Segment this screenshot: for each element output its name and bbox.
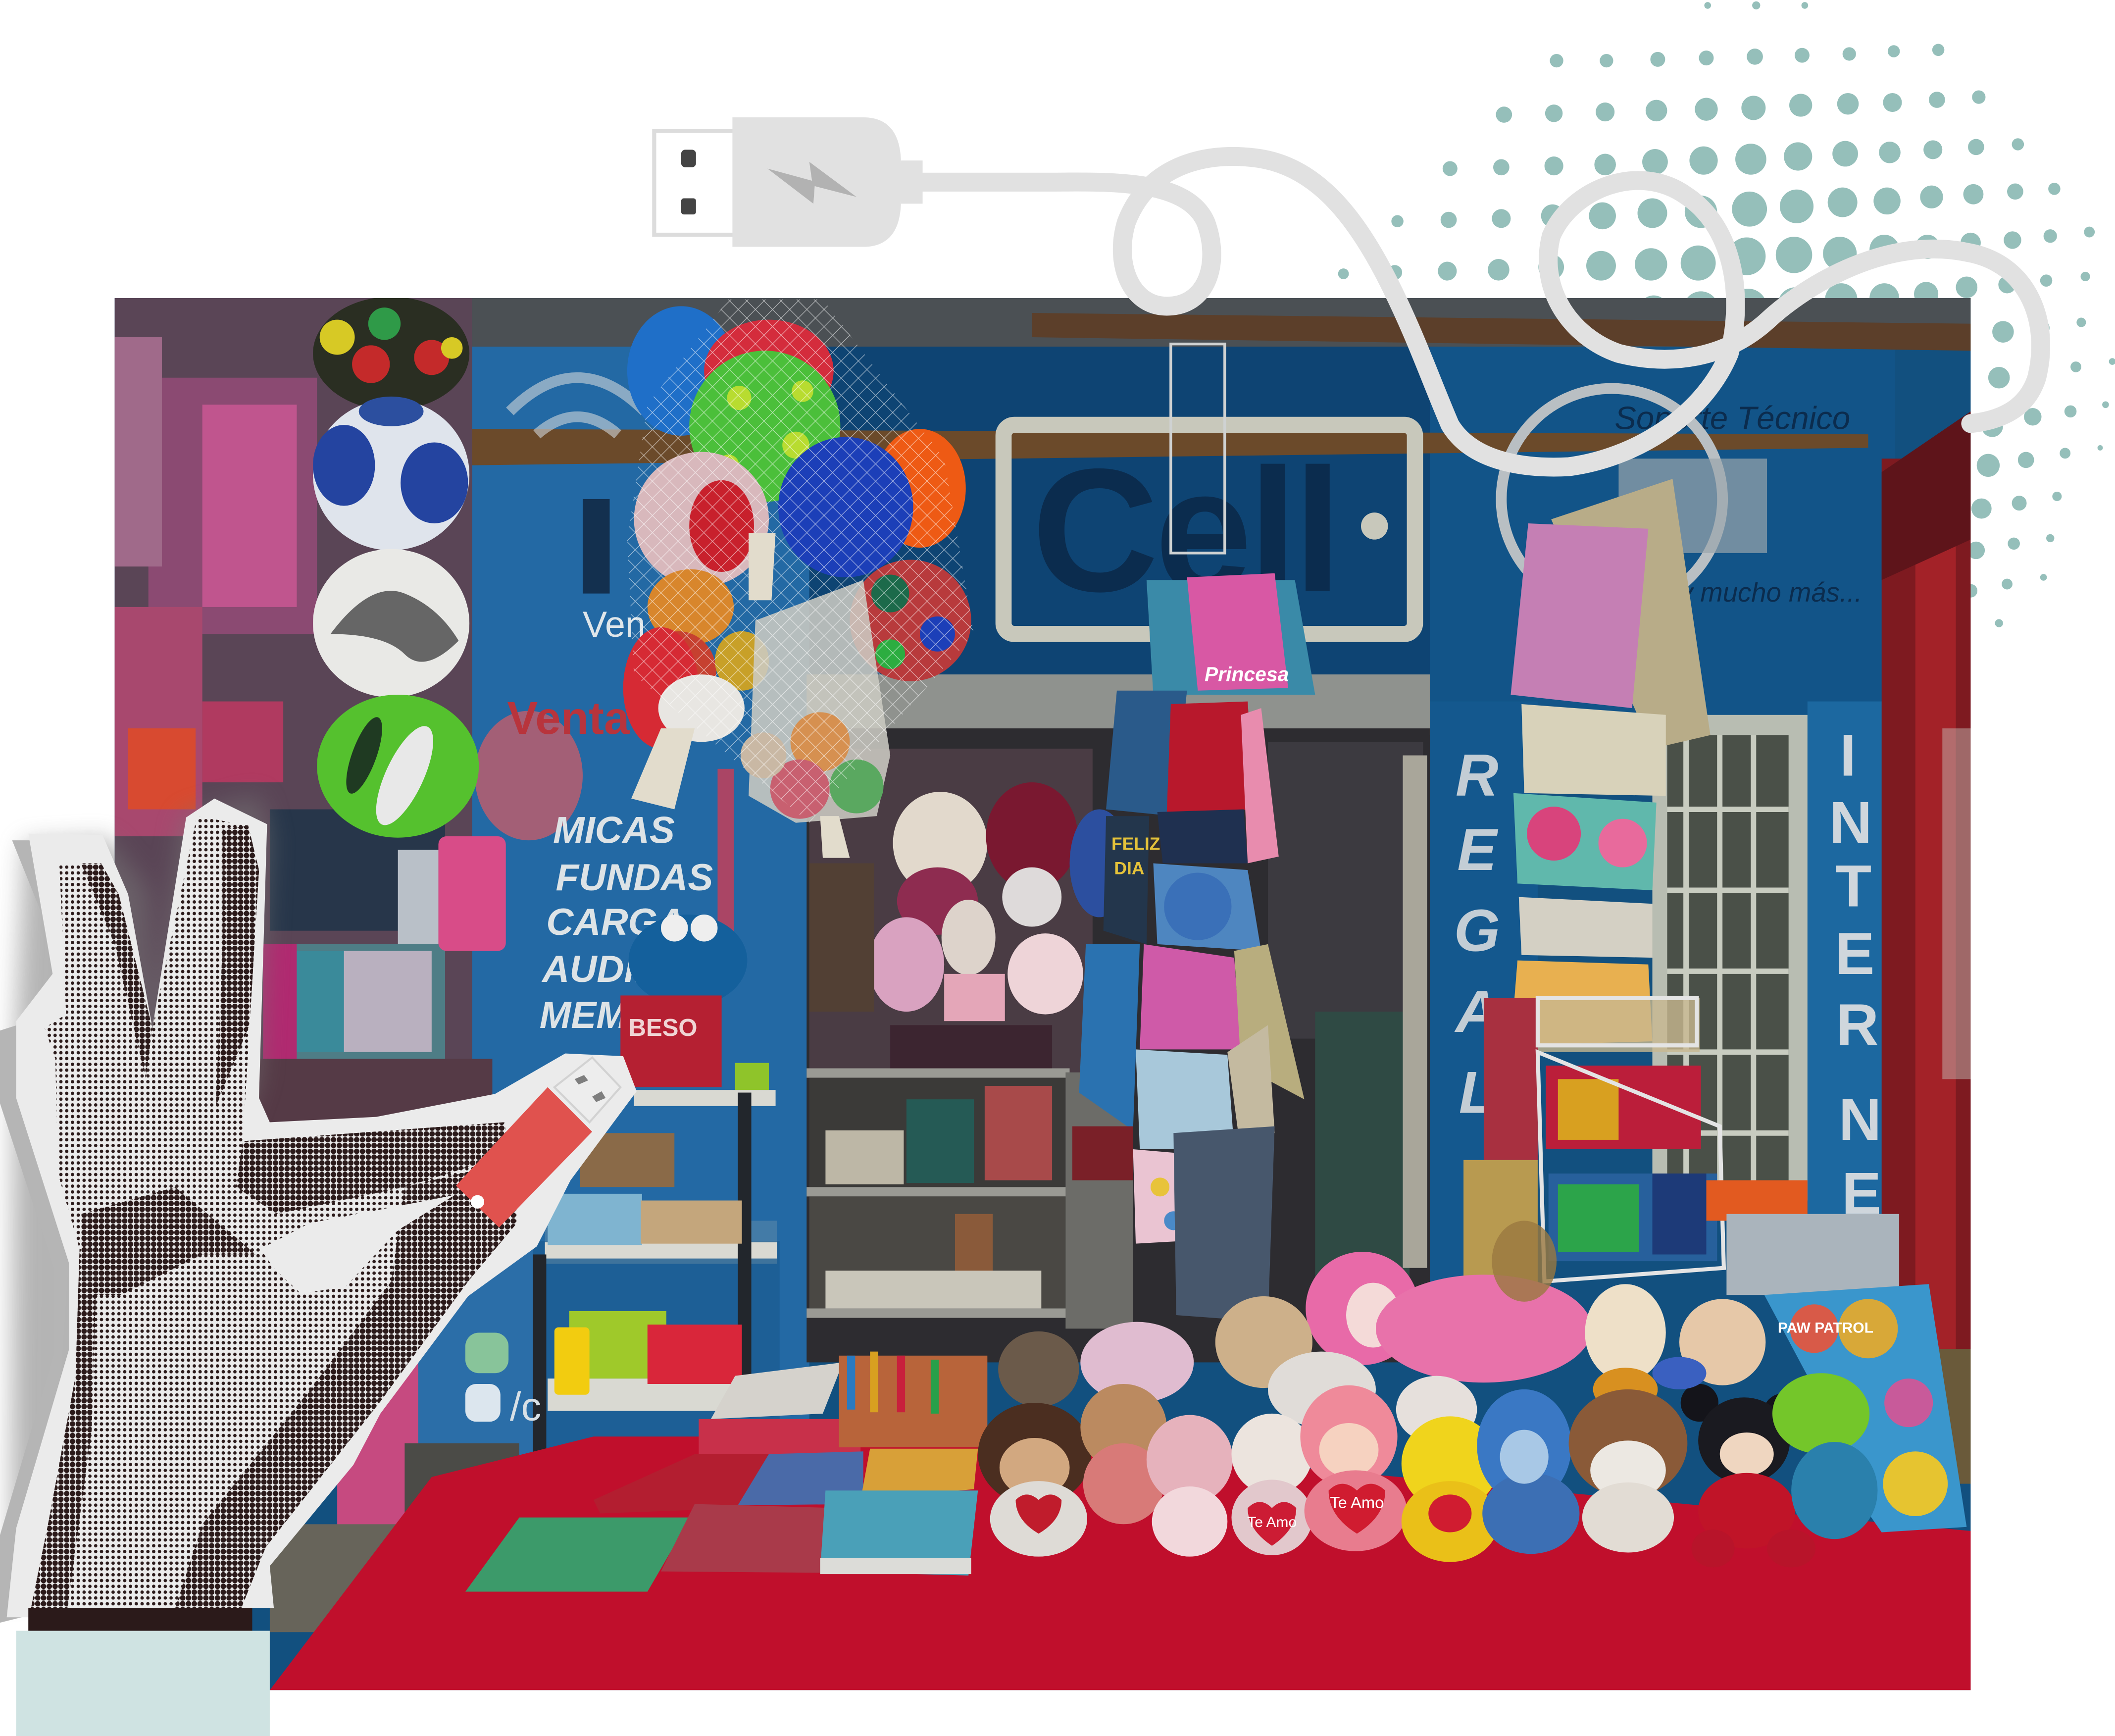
hanging gift bags, centre column — [1072, 344, 1315, 1322]
cable cord — [923, 156, 2041, 467]
sign: wifi icon and shop name: Venta — [507, 692, 630, 744]
soft shadow behind hand — [11, 796, 270, 1605]
metal shelf with books — [806, 1025, 1133, 1328]
row of plush toys on the table: Te Amo — [1330, 1493, 1384, 1512]
plush toys on doorway shelf — [809, 782, 1129, 1021]
decorative teal halftone dot field — [1338, 1, 2115, 627]
sign: wifi icon and shop name: AUDIF — [541, 948, 659, 990]
vertical wall lettering: INTERNET and REGALOS: L — [1459, 1059, 1495, 1125]
lanyard hole — [471, 1195, 484, 1209]
hand holding USB stick, halftone cut-out — [0, 796, 637, 1736]
sign: wifi icon and shop name: y mucho más... — [1677, 577, 1862, 608]
gray offset silhouette — [0, 840, 81, 1623]
photo: shop front with toys and gifts — [115, 297, 1970, 1690]
white shelf with boxes: /c — [510, 1384, 541, 1430]
plug metal tip — [654, 131, 735, 235]
vertical wall lettering: INTERNET and REGALOS — [1454, 722, 1881, 1227]
halftone hand, base tone — [31, 816, 516, 1608]
shop doorway interior — [806, 674, 1430, 1362]
plug contacts — [681, 150, 696, 167]
white paper cut-out — [7, 799, 637, 1617]
sign: wifi icon and shop name — [507, 378, 1862, 1036]
thumb gap highlight — [260, 1195, 454, 1293]
sign: wifi icon and shop name: Cell — [1032, 432, 1342, 628]
halftone hand, dark edge tones — [31, 825, 516, 1608]
vertical wall lettering: INTERNET and REGALOS: R — [1836, 992, 1879, 1058]
row of plush toys on the table — [978, 1357, 1877, 1567]
books and notebooks on table — [465, 1352, 987, 1592]
left pink toy display — [115, 298, 583, 1134]
lightning bolt icon — [767, 162, 856, 204]
balls in mesh bag — [623, 300, 974, 965]
sign: wifi icon and shop name: MEM — [540, 994, 628, 1036]
sign: wifi icon and shop name: Soporte Técnico — [1614, 400, 1850, 436]
vertical wall lettering: INTERNET and REGALOS: T — [1835, 853, 1871, 919]
hanging gift bags, right column — [1484, 479, 1711, 1160]
red door column — [1882, 411, 1970, 1484]
sign: wifi icon and shop name: FUNDAS — [555, 857, 713, 899]
row of plush toys on the table: Te Amo — [1247, 1514, 1297, 1531]
large plush toys behind — [998, 1221, 1966, 1532]
cookie monster plush and red gift bag — [620, 915, 769, 1090]
USB stick silver tip — [554, 1058, 620, 1123]
hanging gift bags, centre column: Princesa — [1205, 663, 1289, 686]
hanging soccer balls — [313, 297, 479, 838]
vertical wall lettering: INTERNET and REGALOS: G — [1454, 898, 1500, 964]
sign: wifi icon and shop name: Ven — [583, 604, 646, 645]
plug body — [732, 117, 901, 247]
second plug contact — [681, 198, 696, 214]
dark cuff band — [28, 1608, 252, 1631]
wooden beam and bamboo pole — [465, 313, 1970, 465]
hanging gift bags, centre column: DIA — [1114, 858, 1144, 878]
USB stick contacts — [575, 1075, 588, 1084]
USB stick second contact — [592, 1091, 605, 1102]
sign: wifi icon and shop name: CARGA — [546, 901, 685, 943]
shop wall background — [115, 298, 1970, 1690]
vertical wall lettering: INTERNET and REGALOS: R — [1456, 742, 1499, 809]
USB cable — [654, 117, 2041, 467]
vertical wall lettering: INTERNET and REGALOS: E — [1835, 920, 1874, 987]
USB stick red body — [456, 1087, 592, 1227]
vertical wall lettering: INTERNET and REGALOS: N — [1829, 790, 1872, 856]
vertical wall lettering: INTERNET and REGALOS: E — [1842, 1161, 1881, 1227]
hanging gift bags, centre column: FELIZ — [1111, 834, 1160, 854]
sign: wifi icon and shop name: MICAS — [553, 810, 675, 852]
vertical wall lettering: INTERNET and REGALOS: I — [1840, 722, 1856, 788]
red tablecloth — [270, 1419, 1970, 1690]
vertical wall lettering: INTERNET and REGALOS: A — [1454, 978, 1499, 1045]
gate with white frame — [1653, 715, 1808, 1201]
cookie monster plush and red gift bag: BESO — [629, 1015, 698, 1041]
plug neck — [901, 160, 923, 204]
large plush toys behind: PAW PATROL — [1778, 1320, 1873, 1336]
vertical wall lettering: INTERNET and REGALOS: E — [1457, 817, 1498, 883]
white shelf with boxes — [270, 1090, 780, 1632]
pale teal sleeve — [16, 1631, 270, 1736]
vertical wall lettering: INTERNET and REGALOS: N — [1839, 1086, 1881, 1153]
wire rack with notebooks — [1463, 998, 1899, 1295]
